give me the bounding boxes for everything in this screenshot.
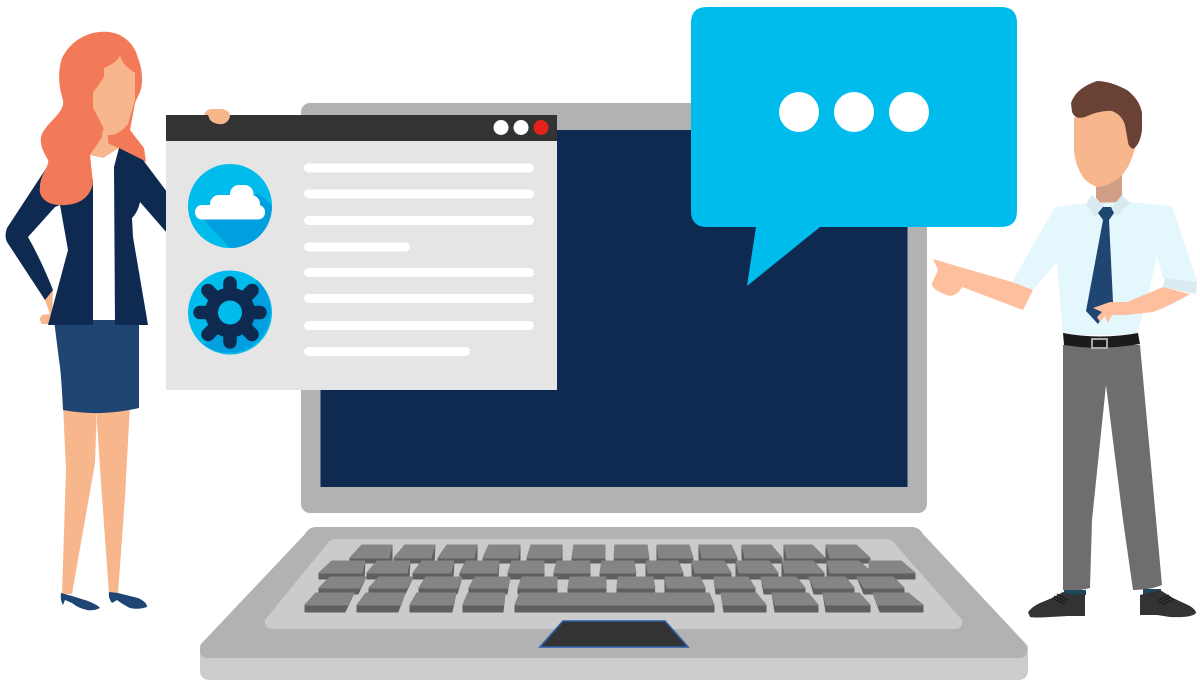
woman neck <box>88 130 119 159</box>
woman legs <box>62 405 130 594</box>
man neck <box>1096 175 1122 208</box>
woman jacket <box>6 148 167 325</box>
man belt <box>1063 333 1140 348</box>
man hair <box>1071 81 1142 149</box>
speech bubble <box>691 7 1017 286</box>
woman lower hand <box>40 290 53 324</box>
laptop <box>200 103 1028 680</box>
typing dots <box>779 92 929 132</box>
man <box>932 81 1197 618</box>
cloud icon <box>188 164 272 248</box>
laptop base <box>200 527 1028 680</box>
man shoes <box>1028 590 1196 618</box>
man face <box>1074 110 1135 187</box>
keyboard keys <box>305 545 923 612</box>
woman's hand holding window <box>204 109 230 124</box>
window body <box>166 140 557 390</box>
man trousers <box>1063 345 1162 591</box>
shoe laces <box>1052 594 1174 605</box>
window title bar <box>166 115 557 141</box>
man resting arm <box>1093 287 1190 323</box>
woman <box>6 32 167 610</box>
application window <box>166 109 557 390</box>
laptop screen lid <box>301 103 927 513</box>
man tie <box>1086 207 1114 324</box>
man pointing arm <box>932 259 1033 310</box>
woman blouse <box>90 148 119 310</box>
woman shoes <box>61 592 147 610</box>
woman skirt <box>54 320 139 413</box>
woman front hair <box>40 32 120 205</box>
shirt collar <box>1086 195 1130 217</box>
woman face <box>93 55 135 135</box>
shirt cuff <box>1163 278 1197 294</box>
gear icon <box>188 270 272 354</box>
text placeholder lines <box>304 164 534 356</box>
woman back hair <box>95 32 146 162</box>
man socks <box>1064 589 1161 596</box>
window buttons <box>494 120 548 135</box>
man shirt <box>1012 202 1197 335</box>
touchpad <box>540 621 688 647</box>
